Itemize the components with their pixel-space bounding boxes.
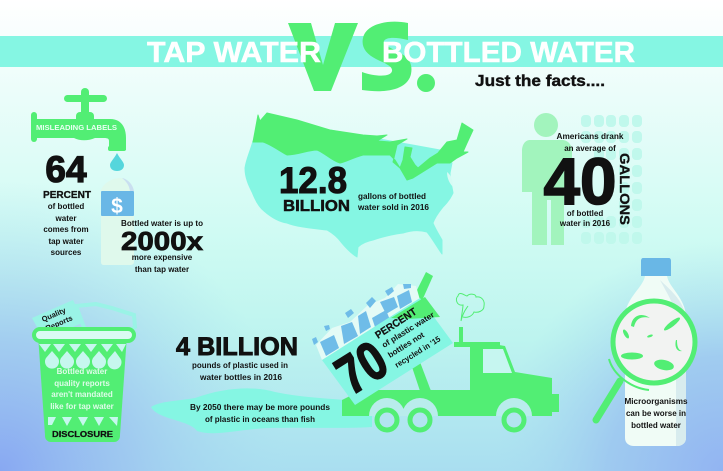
stat: 40 gallons xyxy=(544,132,633,228)
bottles heap xyxy=(312,284,420,360)
stat: 64 percent: PERCENT xyxy=(43,190,91,201)
title: tap water: TAP WATER xyxy=(147,37,321,69)
stat: 70 percent: 70 xyxy=(326,330,398,406)
stat: 64 percent: sources xyxy=(51,248,82,257)
text: microorganisms: bottled water xyxy=(631,421,681,430)
wheels xyxy=(369,398,532,430)
stat: 2000x: 2000x xyxy=(121,226,204,256)
stat: 2000x: than tap water xyxy=(135,265,189,274)
stat: 70 percent: bottles not xyxy=(386,330,426,360)
wastebasket text: quality reports xyxy=(54,379,110,388)
stat: 70 percent xyxy=(326,306,443,406)
stat: 40 gallons: 40 xyxy=(544,144,616,218)
stat: 12.8 billion gallons: water sold in 2016 xyxy=(357,203,430,212)
stat: 4 billion pounds: water bottles in 2016 xyxy=(199,373,283,382)
gallon bottle grid xyxy=(581,115,642,244)
faucet label: MISLEADING LABELS xyxy=(36,125,117,132)
icon: dump truck xyxy=(342,272,559,430)
stat: 12.8 billion gallons xyxy=(279,160,430,215)
wastebasket text xyxy=(50,367,114,411)
icon: wastebasket xyxy=(32,300,135,442)
icon: small bottle: $ xyxy=(111,195,123,218)
stat: 2000x xyxy=(121,219,204,274)
icon: faucet xyxy=(31,88,126,151)
icon: person xyxy=(522,113,572,245)
text: microorganisms: can be worse in xyxy=(626,409,686,418)
icon: small bottle xyxy=(101,178,134,265)
stat: 70 percent: of plastic water xyxy=(380,310,436,350)
stat: 40 gallons: water in 2016 xyxy=(559,219,611,228)
stat: 70 percent: PERCENT xyxy=(373,306,419,342)
stat: 40 gallons: Americans drank xyxy=(556,132,624,141)
title banner xyxy=(0,36,723,67)
title: bottled water: BOTTLED WATER xyxy=(382,37,635,69)
subtitle: Just the facts.... xyxy=(475,73,605,90)
stat: 40 gallons: of bottled xyxy=(567,209,603,218)
text: plastic in oceans xyxy=(190,403,331,424)
stat: 4 billion pounds xyxy=(176,333,298,382)
stat: 40 gallons: an average of xyxy=(564,144,616,153)
crumpled quality report: Reports xyxy=(44,313,74,333)
stat: 64 percent: of bottled xyxy=(48,202,84,211)
dump bed panel xyxy=(322,297,453,405)
text: plastic in oceans: of plastic in oceans than fish xyxy=(205,415,315,424)
truck body xyxy=(342,272,559,416)
stat: 2000x: Bottled water is up to xyxy=(121,219,203,228)
wastebasket text: aren't mandated xyxy=(51,390,113,399)
stat: 64 percent: 64 xyxy=(45,149,87,190)
map of United States xyxy=(245,113,473,257)
large VS. lettering xyxy=(288,22,435,92)
stat: 12.8 billion gallons: gallons of bottled xyxy=(358,192,426,201)
icon: water drop xyxy=(110,153,124,171)
stat: 12.8 billion gallons: BILLION xyxy=(283,198,350,215)
disclosure label: DISCLOSURE xyxy=(52,429,113,439)
stat: 12.8 billion gallons: 12.8 xyxy=(279,160,347,201)
stat: 70 percent: recycled in '15 xyxy=(393,334,443,370)
wastebasket text: like for tap water xyxy=(50,402,114,411)
text: plastic in oceans: By 2050 there may be more pounds xyxy=(190,403,331,412)
crumpled quality report xyxy=(32,300,135,340)
stat: 2000x: more expensive xyxy=(132,253,193,262)
icon: large bottle xyxy=(625,258,686,446)
text: microorganisms xyxy=(624,397,688,430)
stat: 4 billion pounds: pounds of plastic used in xyxy=(192,361,288,370)
stat: 64 percent: comes from xyxy=(43,225,89,234)
stat: 64 percent: water xyxy=(55,214,76,223)
text: microorganisms: Microorganisms xyxy=(624,397,688,406)
stat: 64 percent xyxy=(43,149,91,257)
stat: 40 gallons: GALLONS xyxy=(617,153,633,225)
wastebasket text: Bottled water xyxy=(57,367,107,376)
crumpled quality report: Quality xyxy=(40,305,68,324)
exhaust cloud xyxy=(456,294,484,321)
stat: 4 billion pounds: 4 BILLION xyxy=(176,333,298,361)
icon: magnifying glass with microbes xyxy=(596,301,695,420)
puddle xyxy=(151,388,372,433)
stat: 64 percent: tap water xyxy=(48,237,84,246)
